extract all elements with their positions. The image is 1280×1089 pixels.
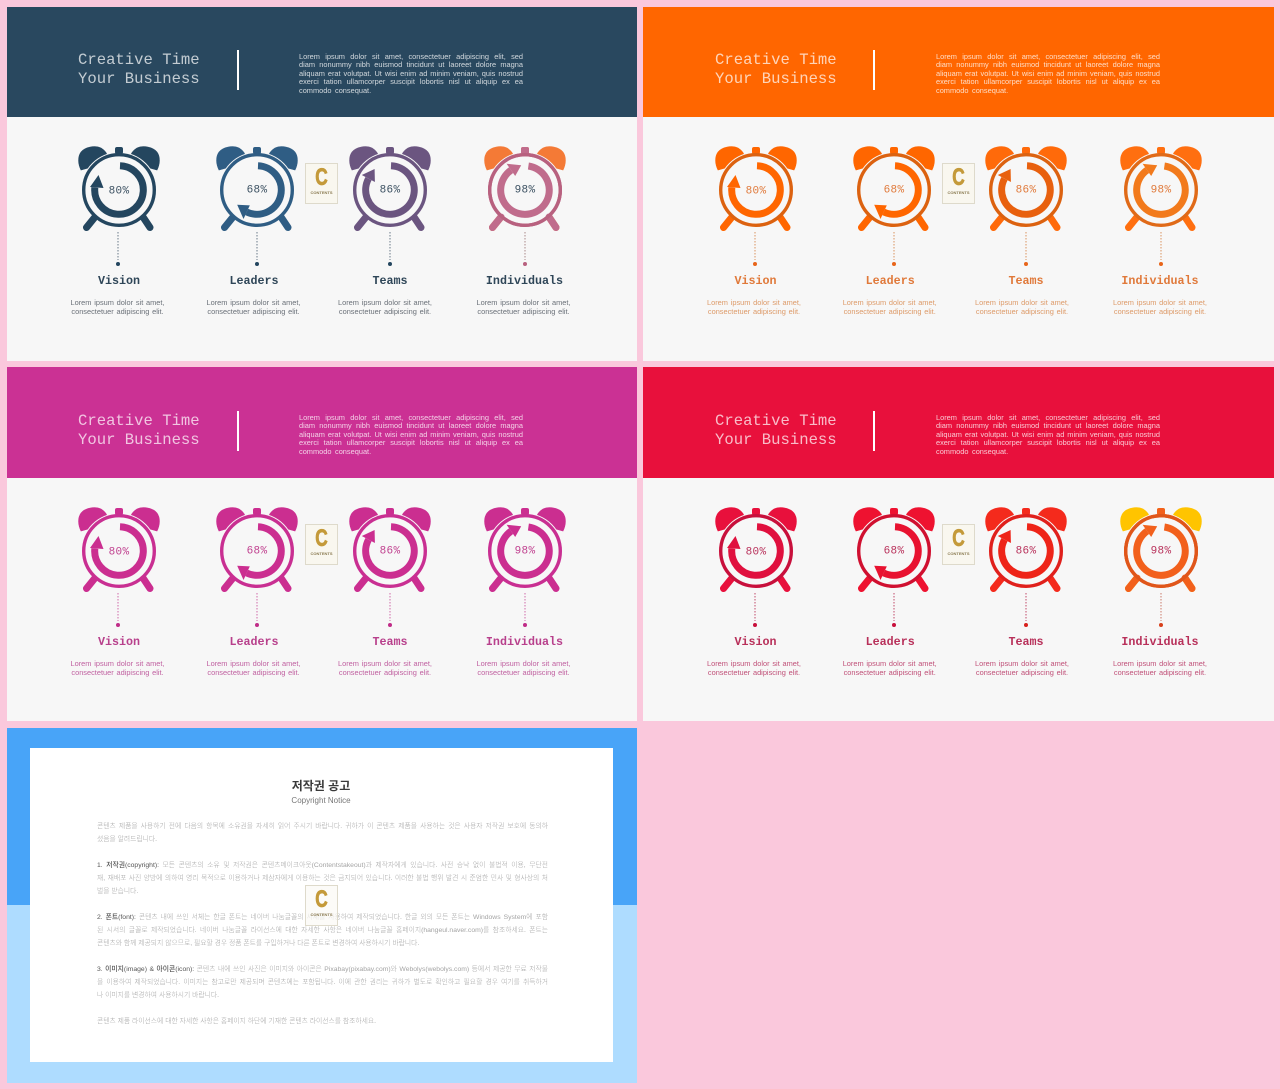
caption: consectetuer adipiscing elit. [207,668,300,677]
caption: consectetuer adipiscing elit. [207,307,300,316]
caption: Lorem ipsum dolor sit amet, [975,658,1069,668]
caption [840,659,940,677]
section 2 font [97,910,548,950]
caption: Lorem ipsum dolor sit amet, [707,659,801,668]
section 2 font: 된 시서의 글꼴로 제작되었습니다. 네이버 나눔글꼴 라이선스에 대한 자세한 사항은 네이버 나눔글꼴 홈페이지(hangeul.naver.com)를 참조하세요. 폰트는 [97,926,548,934]
caption: Lorem ipsum dolor sit amet, [70,298,164,307]
header text block: diam nonummy nibh euismod tincidunt ut laoreet dolore magna [299,60,523,69]
column: Teams [338,146,432,316]
header text block: commodo consequat. [299,447,371,456]
header text block: diam nonummy nibh euismod tincidunt ut laoreet dolore magna [936,421,1160,430]
intro paragraph [97,820,548,846]
column: Individuals [1111,491,1211,681]
caption: consectetuer adipiscing elit. [844,307,936,316]
caption: consectetuer adipiscing elit. [339,306,431,316]
label: Teams [372,274,408,288]
divider bar [873,411,875,451]
caption [70,298,164,316]
icon: alarm clock 98%: 98% [1151,184,1171,196]
icon: alarm clock 80% [78,146,160,266]
column: Individuals [476,507,570,676]
caption: consectetuer adipiscing elit. [708,668,800,677]
header text block: exerci tation ullamcorper suscipit lobortis nisl ut aliquip ex ea [299,438,523,447]
heading: Your Business [78,431,200,449]
section 1 copyright: 1. 저작권(copyright): 모든 콘텐츠의 소유 및 저작권은 콘텐츠메이크아웃(Contentstakeout)과 제작자에게 있습니다. 사전 승낙 없이 불법적 이용, 무단전 [97,862,548,868]
icon: alarm clock 68% [216,146,298,266]
header text block: commodo consequat. [936,447,1008,456]
closing line: 콘텐츠 제품 라이선스에 대한 자세한 사항은 홈페이지 하단에 기재한 콘텐츠 라이선스를 참조하세요. [97,1018,376,1024]
header text block: diam nonummy nibh euismod tincidunt ut laoreet dolore magna [936,60,1160,69]
column: Individuals [1113,146,1207,316]
header text block: diam nonummy nibh euismod tincidunt ut laoreet dolore magna [299,421,523,430]
caption [338,298,432,316]
icon: alarm clock 68% [216,507,298,627]
icon: alarm clock 86%: 86% [380,184,400,196]
header text block: exerci tation ullamcorper suscipit lobortis nisl ut aliquip ex ea [936,438,1160,447]
column: Leaders [206,146,300,316]
caption: consectetuer adipiscing elit. [71,668,164,677]
icon: alarm clock 80%: 80% [109,546,129,558]
icon: alarm clock 98% [1120,146,1202,266]
notice card [30,748,613,1062]
caption: Lorem ipsum dolor sit amet, [338,298,432,306]
column: Teams [976,491,1076,681]
header text block: Lorem ipsum dolor sit amet, consectetuer adipiscing elit, sed [936,52,1160,60]
caption [975,298,1069,316]
logo stamp: CONTENTS [948,551,970,556]
column: Vision [707,146,801,316]
section 1 copyright: 벌을 받습니다. [97,888,138,894]
heading: Creative Time [78,51,200,69]
label: Teams [372,635,408,649]
caption: consectetuer adipiscing elit. [477,668,570,676]
icon: alarm clock 86% [349,507,431,627]
logo stamp: C [315,886,328,913]
logo stamp: CONTENTS [310,190,332,195]
section 3 image and icon: 을 이용하여 제작되었습니다. 이미지는 참고로만 제공되며 콘텐츠에는 포함됩니다. 이에 관한 권리는 귀하가 별도로 확인하고 필요할 경우 여기를 취득하거 [97,978,548,986]
heading: Creative Time [715,412,837,430]
icon: alarm clock 68%: 68% [246,546,267,558]
section 1 copyright: 재, 재배포 사진 양방에 의하여 영리 목적으로 이용하거나 제삼자에게 이용하는 것은 금지되어 있습니다. 이러한 불법 행위 발견 시 준엄한 민사 및 형사상의 처 [97,874,548,882]
divider bar [237,411,239,451]
caption: Lorem ipsum dolor sit amet, [975,298,1069,306]
caption: Lorem ipsum dolor sit amet, [70,659,164,668]
caption: consectetuer adipiscing elit. [1114,668,1206,676]
label: Vision [98,274,140,288]
caption: consectetuer adipiscing elit. [71,307,164,316]
caption: consectetuer adipiscing elit. [339,668,431,676]
heading: Your Business [715,70,837,88]
header text block: Lorem ipsum dolor sit amet, consectetuer adipiscing elit, sed [299,52,523,60]
panel: copyright notice [7,728,637,1083]
label: Individuals [1121,635,1199,649]
caption [707,298,801,316]
intro paragraph: 셨음을 알려드립니다. [97,836,157,842]
caption: consectetuer adipiscing elit. [976,306,1068,316]
heading: Your Business [78,70,200,88]
section 3 image and icon [97,962,548,1002]
divider bar [873,50,875,90]
caption: consectetuer adipiscing elit. [708,307,800,316]
logo stamp [942,524,975,565]
caption: Lorem ipsum dolor sit amet, [1113,298,1207,306]
logo stamp [305,163,338,204]
icon: alarm clock 80%: 80% [745,186,766,198]
icon: alarm clock 86%: 86% [1016,184,1036,196]
panel: crimson slide [643,367,1274,721]
icon: alarm clock 80% [78,507,160,627]
header text block: Lorem ipsum dolor sit amet, consectetuer adipiscing elit, sed [936,412,1160,422]
heading [715,51,837,88]
column: Leaders [843,146,937,316]
label: Leaders [229,274,279,288]
header band [643,7,1274,117]
logo stamp: C [315,164,328,191]
label: Leaders [866,635,915,649]
icon: alarm clock 98% [1111,491,1211,631]
heading: Creative Time [78,412,200,430]
caption: Lorem ipsum dolor sit amet, [338,658,432,668]
icon: alarm clock 86% [349,146,431,266]
column: Vision [70,507,164,677]
section 1 copyright [97,858,548,898]
notice subtitle: Copyright Notice [291,796,351,805]
icon: alarm clock 98%: 98% [1151,546,1171,558]
heading [78,51,200,88]
caption: Lorem ipsum dolor sit amet, [843,659,937,668]
caption [474,658,574,676]
label: Individuals [486,274,563,288]
caption: Lorem ipsum dolor sit amet, [707,298,801,307]
caption: Lorem ipsum dolor sit amet, [843,298,937,307]
logo stamp: CONTENTS [948,190,970,195]
heading [715,412,837,450]
label: Vision [734,635,777,649]
caption [1110,658,1210,676]
icon: alarm clock 80%: 80% [745,546,766,558]
column: Teams [338,507,432,676]
header text block: Lorem ipsum dolor sit amet, consectetuer adipiscing elit, sed [299,412,523,422]
label: Teams [1008,274,1044,288]
icon: alarm clock 86% [985,146,1067,266]
blue top band [7,728,637,905]
caption [1113,298,1207,316]
caption [206,298,300,316]
section 2 font: 콘텐츠와 함께 제공되지 않으므로, 필요할 경우 정품 폰트를 구입하거나 다른 폰트로 변경하여 사용하시기 바랍니다. [97,940,419,946]
caption [338,658,432,676]
caption: Lorem ipsum dolor sit amet, [476,298,570,306]
heading [78,412,200,449]
header text block: commodo consequat. [299,86,371,95]
icon: alarm clock 98% [484,146,566,266]
label: Vision [98,635,140,649]
caption: Lorem ipsum dolor sit amet, [1113,658,1207,668]
section 3 image and icon: 3. 이미지(image) & 아이콘(icon): 콘텐츠 내에 쓰인 사진은 이미지와 아이콘은 Pixabay(pixabay.com)와 Webolys(webolys.com) 등에서 제공한 무료 저작물 [97,966,548,972]
caption [972,658,1072,676]
logo stamp: C [952,164,965,191]
heading: Creative Time [715,51,837,69]
icon: alarm clock 80%: 80% [109,186,129,198]
caption: consectetuer adipiscing elit. [844,668,936,677]
header text block: aliquam erat volutpat. Ut wisi enim ad minim veniam, quis nostrud [936,430,1160,439]
caption: Lorem ipsum dolor sit amet, [206,659,300,668]
panel: navy slide [7,7,637,361]
header text block [299,412,523,456]
section 2 font: 2. 폰트(font): 콘텐츠 내에 쓰인 서체는 한글 폰트는 네이버 나눔글꼴의 서체를 사용하여 제작되었습니다. 한글 외의 모든 폰트는 Windows System에 포함 [97,914,548,920]
icon: alarm clock 80% [715,146,797,266]
caption: consectetuer adipiscing elit. [477,306,570,316]
logo stamp [305,524,338,565]
icon: alarm clock 86% [976,491,1076,631]
label: Individuals [1121,274,1199,288]
label: Leaders [866,274,915,288]
header text block: commodo consequat. [936,86,1008,95]
column: Vision [70,146,164,316]
caption [70,659,164,677]
header text block: aliquam erat volutpat. Ut wisi enim ad minim veniam, quis nostrud [299,430,523,439]
header text block: exerci tation ullamcorper suscipit lobortis nisl ut aliquip ex ea [936,77,1160,86]
header text block [936,414,1160,456]
logo stamp [305,885,338,926]
logo stamp: C [952,525,965,552]
header text block [299,52,523,95]
icon: alarm clock 68%: 68% [883,546,904,558]
caption: consectetuer adipiscing elit. [976,668,1068,676]
label: Vision [734,274,777,288]
section 3 image and icon: 나 이미지를 변경하여 사용하시기 바랍니다. [97,992,219,998]
header text block: aliquam erat volutpat. Ut wisi enim ad minim veniam, quis nostrud [299,69,523,78]
icon: alarm clock 86%: 86% [1016,546,1036,558]
intro paragraph: 콘텐츠 제품을 사용하기 전에 다음의 항목에 소유권을 자세히 읽어 주시기 바랍니다. 귀하가 이 콘텐츠 제품을 사용하는 것은 사용자 저작권 보호에 동의하 [97,822,548,830]
caption [704,659,804,677]
header band [643,367,1274,478]
header text block: exerci tation ullamcorper suscipit lobortis nisl ut aliquip ex ea [299,77,523,86]
icon: alarm clock 80% [706,491,806,631]
divider bar [237,50,239,90]
icon: alarm clock 98%: 98% [514,546,535,558]
caption: consectetuer adipiscing elit. [1114,306,1206,316]
caption [843,298,937,316]
notice title: 저작권 공고 [292,779,350,793]
icon: alarm clock 68% [853,146,935,266]
panel: magenta slide [7,367,637,721]
caption: Lorem ipsum dolor sit amet, [476,658,570,668]
header band [7,367,637,478]
heading: Your Business [715,431,837,449]
icon: alarm clock 98% [474,491,574,631]
caption: Lorem ipsum dolor sit amet, [206,298,300,307]
icon: alarm clock 86%: 86% [380,546,400,558]
header text block [936,52,1160,95]
icon: alarm clock 98%: 98% [514,184,535,196]
caption [476,298,570,316]
label: Teams [1008,635,1044,649]
logo stamp: C [315,525,328,552]
label: Leaders [229,635,279,649]
icon: alarm clock 68%: 68% [883,184,904,196]
header text block: aliquam erat volutpat. Ut wisi enim ad minim veniam, quis nostrud [936,69,1160,78]
logo stamp: CONTENTS [310,551,332,556]
column: Teams [975,146,1069,316]
caption [206,659,300,677]
header band [7,7,637,117]
icon: alarm clock 68% [844,491,944,631]
column: Leaders [206,507,300,677]
column: Vision [706,491,806,681]
logo stamp: CONTENTS [310,912,332,917]
column: Individuals [476,146,570,316]
logo stamp [942,163,975,204]
column: Leaders [844,491,944,681]
label: Individuals [486,635,563,649]
panel: orange slide [643,7,1274,361]
icon: alarm clock 68%: 68% [246,184,267,196]
